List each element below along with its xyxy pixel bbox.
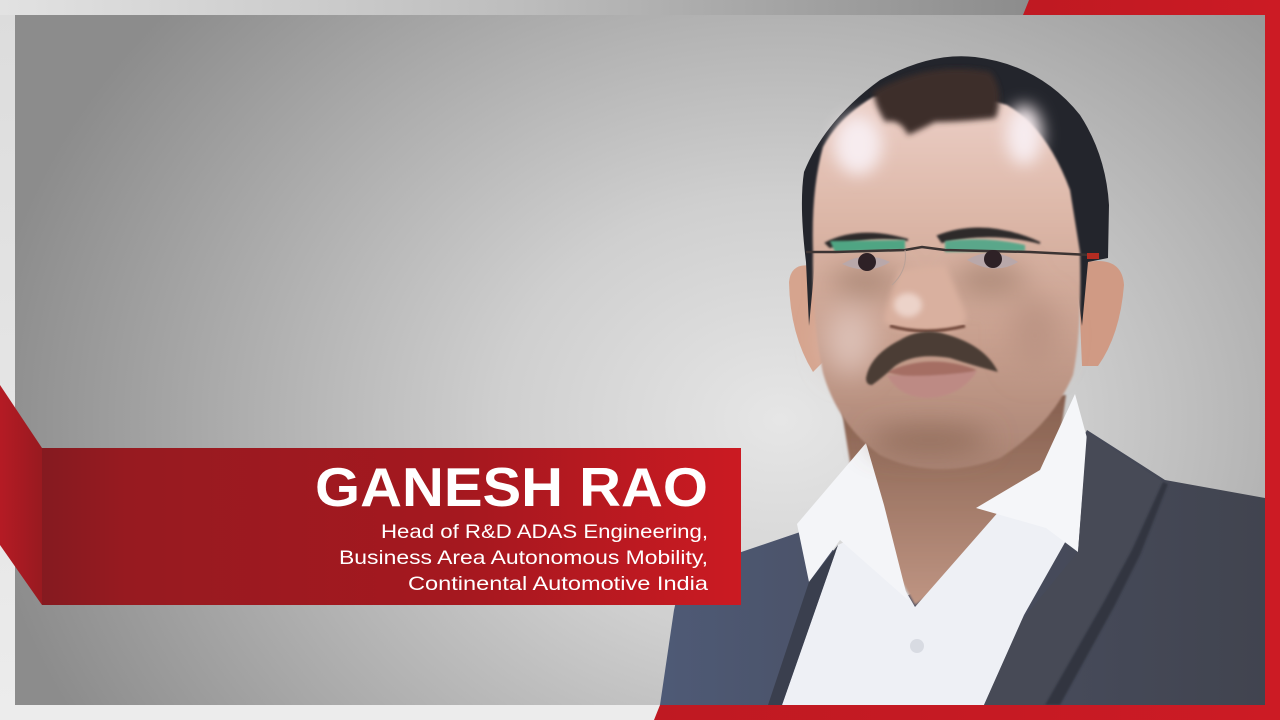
left ear [789, 265, 825, 372]
eyebrows [826, 228, 1040, 247]
left ribbon fold [0, 385, 42, 605]
role line 1: Head of R&D ADAS Engineering, [381, 521, 708, 543]
red corner: top right [1023, 0, 1280, 720]
hair [802, 56, 1109, 326]
cheek shading [826, 266, 1059, 452]
role line 3: Continental Automotive India [408, 573, 708, 595]
red name banner [42, 448, 741, 605]
forehead highlights [834, 105, 1042, 175]
lips [887, 361, 977, 398]
lapel shadow [1045, 482, 1168, 705]
hair patch [873, 69, 999, 135]
glasses [806, 239, 1099, 285]
right ear [1078, 261, 1124, 366]
moustache [866, 332, 998, 385]
right lapel [984, 432, 1163, 705]
top strip [0, 0, 1040, 15]
neck [840, 395, 1066, 605]
name: GANESH RAO [315, 456, 708, 518]
right collar [976, 394, 1087, 552]
face [813, 92, 1080, 469]
shirt [782, 510, 1072, 705]
jacket [660, 430, 1265, 705]
left collar [797, 443, 908, 600]
role line 2: Business Area Autonomous Mobility, [339, 547, 708, 569]
nose [884, 265, 966, 332]
portrait [660, 56, 1265, 705]
shirt button [910, 639, 924, 653]
left lapel [768, 545, 838, 705]
eyes [842, 250, 1018, 271]
red corner: bottom [654, 705, 1280, 720]
